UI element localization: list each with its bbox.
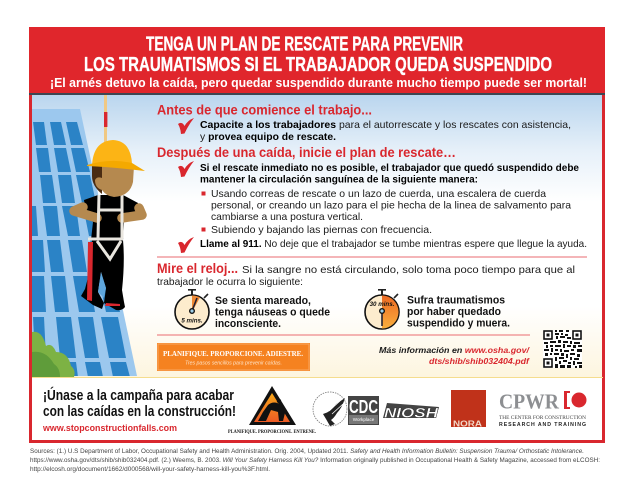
sources: https://www.osha.gov/dts/shib/shib032404.pdf. (2.) Weems, B. 2003. Will Your Safety Harness Kill You? Information originally published in Occupational Health & Safety Magazine, accessed from eLCOSH:: [30, 457, 600, 464]
arms: [74, 207, 142, 218]
logo: CDC: Workplace: [353, 417, 375, 422]
heading: Después de una caída, inicie el plan de rescate…: [157, 144, 456, 160]
campaign call to action: ¡Únase a la campaña para acabar: [43, 386, 234, 404]
bullet list: [202, 188, 571, 236]
head: [92, 166, 134, 197]
stopwatch: 30 mins: 30 mins.: [370, 301, 395, 308]
effect text: 30 mins: [407, 294, 510, 330]
effect text: 30 mins: suspendido y muera.: [407, 318, 510, 330]
check mark: [178, 237, 194, 253]
hard hat: [87, 140, 145, 171]
harness straps: [88, 195, 123, 259]
logo: CDC: [348, 396, 379, 425]
stopwatch: 5 mins: 5 mins.: [181, 318, 203, 324]
campaign call to action: www.stopconstructionfalls.com: [42, 423, 177, 434]
sources: Sources: (1.) U.S Department of Labor, Occupational Safety and Health Administration. Orig. 2004, Updated 2011. Safety and Health Information Bulletin: Suspension Trauma/ Orthostatic Intolerance.: [30, 448, 584, 455]
more info link: dts/shib/shib032404.pdf: [429, 356, 530, 366]
effect text: 5 mins: tenga náuseas o quede: [215, 306, 330, 318]
section: before work: [157, 102, 571, 143]
more info link: Más información en www.osha.gov/: [379, 345, 531, 355]
rope: [104, 95, 107, 143]
sources: [30, 448, 600, 473]
stopwatch: 5 mins: [175, 289, 209, 329]
logo: CPWR: RESEARCH AND TRAINING: [499, 422, 586, 428]
section: watch the clock: [157, 260, 575, 330]
check mark: [178, 161, 194, 177]
title: TENGA UN PLAN DE RESCATE PARA PREVENIR: [146, 34, 463, 56]
intro text: [157, 264, 575, 288]
campaign call to action: [42, 386, 236, 434]
logo: NORA: [451, 390, 486, 428]
text block: [200, 119, 571, 143]
title banner: [29, 27, 605, 95]
torso: [84, 195, 138, 240]
logo: NIOSH: NIOSH: [384, 404, 439, 420]
check mark: [178, 118, 194, 134]
logo: NORA: NORA: [453, 418, 482, 428]
text block: Capacite a los trabajadores para el autorrescate y los rescates con asistencia,: [200, 119, 571, 131]
bullet list: personal, or creando un lazo para el pie hecha de la linea de salvamento para: [211, 200, 571, 212]
logo: construction triangle: PLANIFIQUE. PROPORCIONE. ENTRENE.: [228, 430, 317, 435]
text block: mantener la circulación sanguínea de la siguiente manera:: [200, 174, 478, 186]
sources: http://elcosh.org/document/1662/d000568/will-your-safety-harness-kill-you%3F.html.: [30, 466, 270, 473]
QR code: [543, 330, 582, 368]
intro text: trabajador le ocurra lo siguiente:: [157, 276, 303, 288]
campaign call to action: con las caídas en la construcción!: [43, 403, 236, 420]
building windows: [32, 122, 130, 377]
orange campaign box: [157, 343, 310, 371]
logo: CPWR: [499, 390, 586, 428]
text block: y provea equipo de rescate.: [200, 131, 336, 143]
text block: Si el rescate inmediato no es posible, el trabajador que quedó suspendido debe: [200, 162, 579, 174]
effect text: 5 mins: Se sienta mareado,: [215, 295, 311, 307]
intro text: Si la sangre no está circulando, solo toma poco tiempo para que al: [242, 264, 575, 276]
section: after a fall: [157, 144, 587, 253]
logo: HHS seal: [313, 392, 347, 426]
logo: CPWR: THE CENTER FOR CONSTRUCTION: [499, 416, 586, 421]
bushes: [32, 332, 75, 377]
more info link: [379, 345, 531, 366]
bullet list: Subiendo y bajando las piernas con frecuencia.: [211, 224, 432, 236]
bullet list: cambiarse a una postura vertical.: [211, 211, 363, 223]
effect text: 30 mins: por haber quedado: [407, 306, 501, 318]
effect text: 30 mins: Sufra traumatismos: [407, 294, 505, 306]
call 911: Llame al 911. No deje que el trabajador se tumbe mientras espere que llegue la ayuda.: [200, 238, 587, 250]
effect text: 5 mins: inconsciente.: [215, 318, 281, 330]
title: [84, 34, 552, 76]
page frame: [29, 27, 605, 443]
subtitle: ¡El arnés detuvo la caída, pero quedar suspendido durante mucho tiempo puede ser mortal!: [50, 76, 587, 90]
orange campaign box: Tres pasos sencillos para prevenir caídas.: [185, 360, 282, 366]
bullet list: Usando correas de rescate o un lazo de cuerda, una escalera de cuerda: [211, 188, 546, 200]
text block: [200, 162, 579, 186]
orange campaign box: PLANIFIQUE. PROPORCIONE. ADIESTRE.: [163, 350, 303, 358]
illustration: suspended worker: [74, 95, 145, 310]
logo: CDC: CDC: [349, 397, 378, 417]
logo: construction triangle: [228, 386, 317, 435]
heading: Mire el reloj...: [157, 260, 238, 276]
heading: Antes de que comience el trabajo...: [157, 102, 372, 118]
logo: CPWR: CPWR: [499, 390, 560, 414]
illustration: building: [32, 109, 137, 377]
legs and boots: [81, 240, 125, 310]
red lanyard: [87, 242, 93, 301]
effect text: 5 mins: [215, 295, 330, 330]
stopwatch: 30 mins: [365, 289, 399, 329]
